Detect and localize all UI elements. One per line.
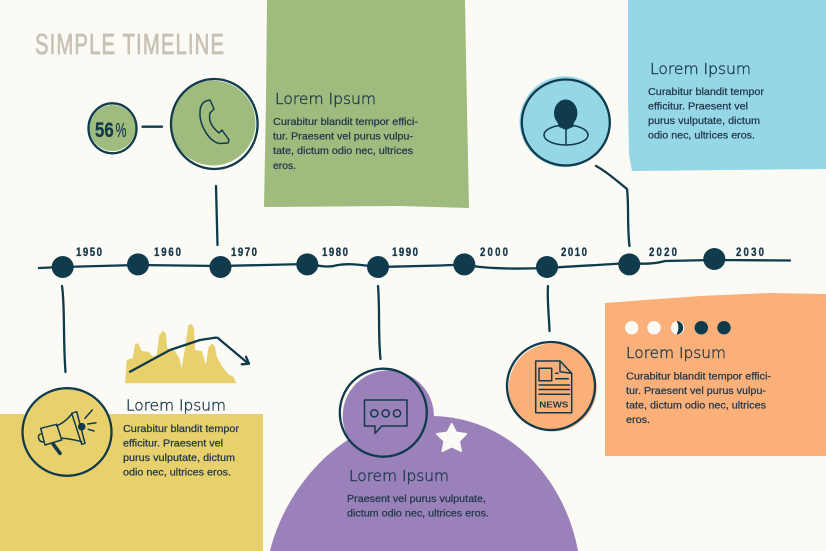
text block: blue card: purus vulputate, dictum: [648, 116, 760, 127]
text block: orange card: tur. Praesent vel purus vulpu-: [626, 386, 766, 397]
year labels: 2020: [649, 246, 677, 259]
connectors: [62, 166, 630, 372]
icon: news: NEWS: [539, 400, 569, 410]
year labels: 2010: [561, 246, 587, 259]
heading: green card: Lorem Ipsum: [275, 90, 376, 108]
year labels: 1960: [154, 246, 181, 259]
badge: 56%: 56: [95, 119, 114, 142]
text block: blue card: efficitur. Praesent vel: [648, 102, 748, 112]
heading: purple card: Lorem Ipsum: [349, 467, 449, 485]
heading: yellow card: Lorem Ipsum: [126, 396, 226, 414]
icon: speech bubble: [340, 369, 434, 462]
panel: yellow megaphone card: [0, 396, 263, 551]
dash connector: [142, 126, 162, 128]
text block: orange card: [626, 372, 771, 426]
icon: megaphone: [22, 388, 112, 476]
badge: 56%: [88, 103, 136, 153]
year labels: 2030: [736, 246, 764, 259]
progress dots: [625, 321, 731, 334]
text block: yellow card: purus vulputate, dictum: [123, 453, 235, 464]
icon: news: [507, 342, 597, 432]
timeline: [39, 246, 790, 278]
text block: green card: Curabitur blandit tempor effici-: [273, 117, 418, 128]
text block: blue card: odio nec, ultrices eros.: [648, 130, 755, 142]
panel: purple dome card: [270, 416, 578, 551]
panel: green phone card: [264, 0, 469, 208]
text block: yellow card: efficitur. Praesent vel: [123, 438, 223, 450]
panel: blue person card: [628, 0, 826, 171]
text block: yellow card: Curabitur blandit tempor: [123, 424, 240, 435]
year labels: [76, 246, 764, 259]
year labels: 1980: [322, 246, 348, 259]
text block: yellow card: odio nec, ultrices eros.: [123, 468, 231, 478]
timeline nodes: [52, 248, 725, 278]
heading: blue card: Lorem Ipsum: [650, 60, 751, 78]
text block: orange card: eros.: [626, 415, 650, 426]
title: SIMPLE TIMELINE: [35, 29, 224, 61]
year labels: 1990: [392, 246, 418, 259]
text block: blue card: Curabitur blandit tempor: [648, 87, 765, 98]
text block: purple card: dictum odio nec, ultrices eros.: [347, 508, 489, 520]
text block: blue card: [648, 87, 765, 142]
badge: 56%: %: [116, 119, 127, 142]
icon: star: [437, 424, 466, 451]
year labels: 1950: [76, 246, 102, 259]
panel: orange news card: [605, 293, 826, 456]
text block: orange card: Curabitur blandit tempor effici-: [626, 372, 771, 382]
year labels: 1970: [231, 246, 257, 259]
text block: green card: tate, dictum odio nec, ultrices: [273, 146, 413, 157]
text block: orange card: tate, dictum odio nec, ultrices: [626, 400, 766, 412]
icon: phone: [170, 79, 258, 169]
text block: green card: eros.: [273, 161, 296, 172]
heading: orange card: Lorem Ipsum: [626, 344, 726, 362]
text block: purple card: Praesent vel purus vulputate,: [347, 494, 486, 505]
text block: purple card: [347, 494, 489, 520]
text block: green card: tur. Praesent vel purus vulpu-: [273, 132, 413, 142]
icon: person: [520, 76, 610, 167]
chart: area with trend arrow: [125, 324, 249, 383]
text block: green card: [273, 117, 418, 172]
text block: yellow card: [123, 424, 240, 478]
year labels: 2000: [480, 246, 508, 259]
